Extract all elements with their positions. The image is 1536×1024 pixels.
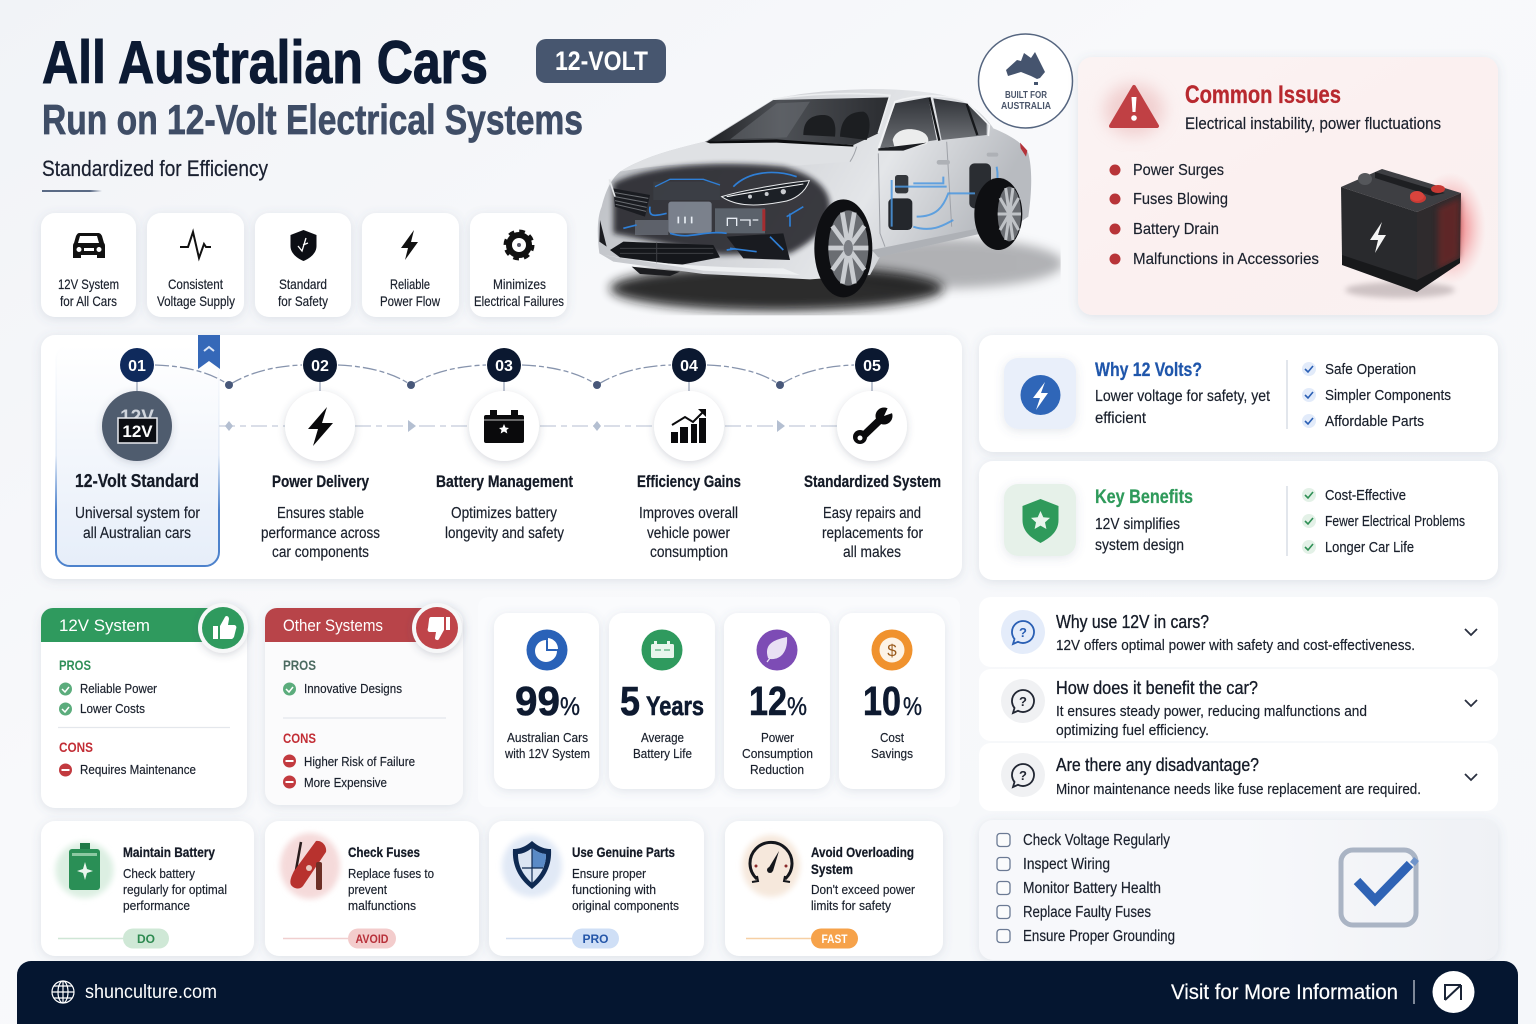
icon: pie chart	[526, 630, 568, 670]
issue list: Power Surges	[1133, 162, 1224, 179]
stat: 12 percent: Consumption	[742, 746, 813, 761]
tip card: maintain battery	[41, 821, 254, 956]
subtitle: Run on 12-Volt Electrical Systems	[42, 96, 583, 143]
card: other systems pros and cons: Higher Risk of Failure	[304, 754, 415, 769]
tag: avoid: AVOID	[356, 932, 389, 946]
card: other systems pros and cons: Innovative Designs	[304, 681, 402, 696]
icon: dollar coin: $	[887, 641, 897, 660]
panel: key benefits: system design	[1095, 537, 1184, 554]
footer bar	[17, 961, 1518, 1024]
tag: fast	[811, 928, 858, 948]
engine components	[653, 182, 720, 200]
faq: benefit: optimizing fuel efficiency.	[1056, 723, 1209, 739]
tag: fast: FAST	[822, 932, 848, 946]
icon: gauge	[742, 835, 800, 897]
step 02: 02	[311, 358, 329, 375]
icon: dollar coin	[872, 630, 912, 670]
panel: checklist	[979, 820, 1498, 960]
card: 12V system pros and cons: Lower Costs	[80, 701, 145, 716]
tip card: check fuses: malfunctions	[348, 898, 416, 913]
step 05: all makes	[843, 544, 901, 561]
car illustration	[598, 89, 1063, 311]
front grille	[613, 188, 650, 217]
tip card: avoid overloading: limits for safety	[811, 898, 891, 913]
step 05: replacements for	[822, 525, 923, 542]
feature card: 12V system: for All Cars	[60, 293, 117, 309]
panel: why 12 volts: Why 12 Volts?	[1095, 360, 1202, 381]
footer bar: shunculture.com	[85, 982, 217, 1003]
checklist: benefits: Fewer Electrical Problems	[1325, 514, 1465, 530]
tip card: check fuses: Replace fuses to	[348, 866, 434, 881]
tip card: check fuses: Check Fuses	[348, 844, 420, 860]
check items	[997, 832, 1175, 945]
step 04: 04	[680, 358, 698, 375]
card: other systems pros and cons: Other Systems	[283, 617, 383, 635]
card: 12V system pros and cons: PROS	[59, 657, 91, 673]
check items: Check Voltage Regularly	[1023, 832, 1170, 849]
tip card: genuine parts	[489, 821, 704, 956]
icon: rising bar chart	[654, 391, 724, 461]
step 05	[804, 348, 941, 561]
headlight	[722, 181, 809, 205]
step 02	[261, 348, 380, 561]
checklist: benefits: Longer Car Life	[1325, 540, 1414, 556]
stat: 12 percent: Reduction	[750, 762, 804, 777]
panel: key benefits	[979, 461, 1498, 580]
check items: Replace Faulty Fuses	[1023, 904, 1151, 921]
card: other systems pros and cons: CONS	[283, 730, 316, 746]
tag: avoid	[348, 928, 396, 948]
stat: 99 percent: %	[560, 693, 580, 721]
feature row	[41, 213, 567, 317]
feature card: safety: for Safety	[278, 293, 328, 309]
feature card: safety: Standard	[279, 276, 327, 292]
check items: Monitor Battery Health	[1023, 880, 1161, 897]
issue list: Fuses Blowing	[1133, 191, 1228, 208]
step 05: Easy repairs and	[823, 505, 921, 522]
checklist: benefits	[1302, 488, 1465, 556]
flow lines	[219, 420, 837, 432]
step 03: longevity and safety	[445, 525, 564, 542]
faq: why use 12V: 12V offers optimal power with safety and cost-effectiveness.	[1056, 638, 1415, 654]
tip card: genuine parts: Ensure proper	[572, 866, 647, 881]
feature card: 12V system: 12V System	[58, 276, 119, 292]
icon: question bubble	[1001, 679, 1045, 723]
tagline: Standardized for Efficiency	[42, 156, 268, 181]
feature card: failures	[470, 213, 567, 317]
icon: red fuse tool	[280, 833, 340, 899]
connector dots	[225, 381, 784, 389]
step 04: Efficiency Gains	[637, 472, 741, 491]
badge: 12-volt	[536, 39, 666, 83]
bookmark ribbon	[198, 335, 220, 369]
stat: 10 percent: %	[903, 693, 922, 721]
icon: 12V battery: 12V	[122, 422, 153, 441]
step 01: all Australian cars	[83, 525, 191, 542]
icon: 12V battery	[102, 391, 172, 461]
tag: do: DO	[137, 932, 155, 946]
badge: built for australia	[978, 34, 1072, 128]
tip card: check fuses	[265, 821, 479, 956]
stat: 12 percent	[724, 613, 830, 789]
feature card: failures: Electrical Failures	[474, 293, 564, 309]
tip card: avoid overloading: Avoid Overloading	[811, 844, 914, 860]
icon: thumbs down	[412, 603, 462, 653]
step 04	[637, 348, 741, 561]
card: 12V system pros and cons: 12V System	[59, 617, 150, 635]
tip card: avoid overloading	[725, 821, 943, 956]
icon: large check mark	[1341, 850, 1419, 925]
check items: Ensure Proper Grounding	[1023, 928, 1175, 945]
icon: wrench	[837, 391, 907, 461]
icon: question bubble: ?	[1019, 768, 1027, 783]
icon: pulse	[180, 232, 211, 258]
stat: 12 percent: 12	[749, 678, 787, 724]
step 03	[436, 348, 573, 542]
faq: disadvantage	[979, 743, 1498, 811]
tip card: avoid overloading: System	[811, 861, 853, 877]
faq: why use 12V	[979, 597, 1498, 667]
faq: benefit: How does it benefit the car?	[1056, 678, 1258, 698]
feature card: failures: Minimizes	[493, 276, 546, 292]
card: 12V system pros and cons	[41, 603, 248, 808]
step 01	[75, 348, 200, 542]
step 03: 03	[495, 358, 513, 375]
stat: 5 years: Average	[641, 730, 684, 745]
engine bay shadow	[613, 164, 830, 255]
feature card: voltage: Voltage Supply	[157, 293, 235, 309]
hood	[621, 142, 804, 172]
panel: key benefits: Key Benefits	[1095, 487, 1193, 508]
stat: 5 years: 5	[620, 678, 640, 724]
icon: shield tile	[1004, 484, 1076, 556]
feature card: 12V system	[41, 213, 136, 317]
card: other systems pros and cons: More Expensive	[304, 775, 387, 790]
windshield	[707, 97, 890, 145]
card: other systems pros and cons: PROS	[283, 657, 316, 673]
panel: why 12 volts: Lower voltage for safety, yet	[1095, 388, 1271, 405]
badge: built for australia: BUILT FOR	[1005, 90, 1048, 101]
check items: Inspect Wiring	[1023, 856, 1110, 873]
step 03: Battery Management	[436, 472, 573, 491]
feature card: power flow	[362, 213, 459, 317]
stat: 10 percent: 10	[863, 678, 901, 724]
stat: 5 years: Battery Life	[633, 746, 692, 761]
step 05: 05	[863, 358, 881, 375]
tip card: check fuses: prevent	[348, 882, 387, 897]
feature card: power flow: Reliable	[390, 276, 430, 292]
step 01: 12-Volt Standard	[75, 471, 199, 491]
step 04: Improves overall	[639, 505, 738, 522]
issue list	[1110, 162, 1319, 268]
step 04: consumption	[650, 544, 728, 561]
badge: built for australia: AUSTRALIA	[1001, 101, 1051, 112]
step 01: Universal system for	[75, 505, 200, 522]
faq: benefit: It ensures steady power, reducing malfunctions and	[1056, 704, 1367, 720]
panel: why 12 volts	[979, 335, 1498, 452]
icon: globe	[52, 981, 74, 1003]
stat: 99 percent	[494, 613, 599, 789]
tip card: genuine parts: original components	[572, 898, 679, 913]
subheading: Electrical instability, power fluctuations	[1185, 115, 1441, 133]
panel: common issues	[1078, 57, 1498, 315]
icon: car battery	[1341, 169, 1486, 298]
stat: 5 years: Years	[646, 691, 704, 721]
issue list: Malfunctions in Accessories	[1133, 251, 1319, 268]
tip card: maintain battery: Maintain Battery	[123, 844, 215, 860]
title: All Australian Cars	[42, 29, 488, 96]
stat: 99 percent: with 12V System	[504, 746, 590, 761]
step 01: 01	[128, 358, 146, 375]
panel: why 12 volts: efficient	[1095, 410, 1147, 427]
badge: 12-volt: 12-VOLT	[555, 46, 648, 76]
step 05: Standardized System	[804, 472, 941, 491]
feature card: safety	[255, 213, 351, 317]
checklist: why: Affordable Parts	[1325, 414, 1424, 430]
header	[41, 608, 230, 642]
stat: 10 percent: Cost	[880, 730, 904, 745]
footer bar: Visit for More Information	[1171, 980, 1398, 1004]
panel: process steps	[41, 335, 962, 579]
step 03: Optimizes battery	[451, 505, 557, 522]
tag: pro: PRO	[582, 932, 609, 946]
tag: pro	[572, 928, 619, 948]
feature card: voltage	[147, 213, 244, 317]
icon: external link arrow	[1432, 971, 1474, 1013]
icon: shield	[290, 230, 316, 261]
card: 12V system pros and cons: CONS	[59, 739, 93, 755]
tip card: maintain battery: Check battery	[123, 866, 195, 881]
card: 12V system pros and cons: Requires Maintenance	[80, 762, 196, 777]
panel: key benefits: 12V simplifies	[1095, 516, 1180, 533]
highlight card	[56, 345, 219, 566]
card: 12V system pros and cons: Reliable Power	[80, 681, 158, 696]
tip card: genuine parts: Use Genuine Parts	[572, 844, 675, 860]
stat: 5 years	[609, 613, 715, 789]
rear wheel	[974, 178, 1022, 250]
icon: gear	[506, 232, 532, 258]
tag: do	[123, 928, 169, 948]
icon: question bubble: ?	[1019, 694, 1027, 709]
heading: Common Issues	[1185, 81, 1341, 109]
icon: bolt tile	[1004, 358, 1076, 429]
icon: 12V battery: 12V	[120, 407, 154, 428]
lower intake	[610, 242, 720, 265]
stat: 12 percent: Power	[761, 730, 795, 745]
step 02: car components	[272, 544, 369, 561]
issue list: Battery Drain	[1133, 221, 1219, 238]
icon: leaf	[756, 630, 798, 670]
icon: question bubble	[1001, 753, 1045, 797]
parts in door	[888, 163, 998, 230]
checklist: why: Safe Operation	[1325, 362, 1416, 378]
step 04: vehicle power	[647, 525, 730, 542]
feature card: voltage: Consistent	[168, 276, 223, 292]
tip card: maintain battery: regularly for optimal	[123, 882, 227, 897]
sill	[872, 228, 978, 257]
faq: disadvantage: Minor maintenance needs like fuse replacement are required.	[1056, 782, 1421, 798]
icon: question bubble	[1001, 610, 1045, 654]
front wheel	[814, 199, 872, 297]
icon: lightning bolt	[285, 391, 355, 461]
header	[265, 608, 445, 642]
stat: 12 percent: %	[787, 693, 807, 721]
panel: statistics	[478, 597, 960, 807]
faq: benefit	[979, 669, 1498, 741]
faq: why use 12V: Why use 12V in cars?	[1056, 612, 1209, 632]
checklist: why: Simpler Components	[1325, 388, 1451, 404]
stat: 10 percent: Savings	[871, 746, 913, 761]
step 02: Ensures stable	[277, 505, 364, 522]
feature card: power flow: Power Flow	[380, 293, 441, 309]
stat: 10 percent	[839, 613, 945, 789]
stat: 99 percent: 99	[515, 678, 560, 724]
step 02: Power Delivery	[272, 472, 369, 491]
icon: thumbs up	[198, 603, 248, 653]
icon: battery	[469, 391, 539, 461]
icon: map of australia	[1006, 52, 1045, 79]
tip card: avoid overloading: Don't exceed power	[811, 882, 916, 897]
icon: bolt	[401, 230, 418, 260]
tip card: maintain battery: performance	[123, 898, 190, 913]
icon: blue shield	[502, 835, 562, 897]
step 02: performance across	[261, 525, 380, 542]
icon: question bubble: ?	[1019, 625, 1027, 640]
faq: disadvantage: Are there any disadvantage?	[1056, 755, 1259, 775]
checklist: benefits: Cost-Effective	[1325, 488, 1406, 504]
connector arcs	[155, 365, 854, 385]
mirror	[893, 129, 928, 149]
icon: green battery	[56, 842, 114, 898]
stat: 99 percent: Australian Cars	[507, 730, 588, 745]
side windows	[880, 97, 937, 148]
icon: car	[73, 233, 105, 258]
icon: battery	[642, 630, 682, 670]
icon: warning triangle	[1104, 84, 1164, 136]
checklist: why	[1302, 362, 1451, 430]
tip card: genuine parts: functioning with	[572, 882, 656, 897]
card: other systems pros and cons	[265, 603, 463, 805]
